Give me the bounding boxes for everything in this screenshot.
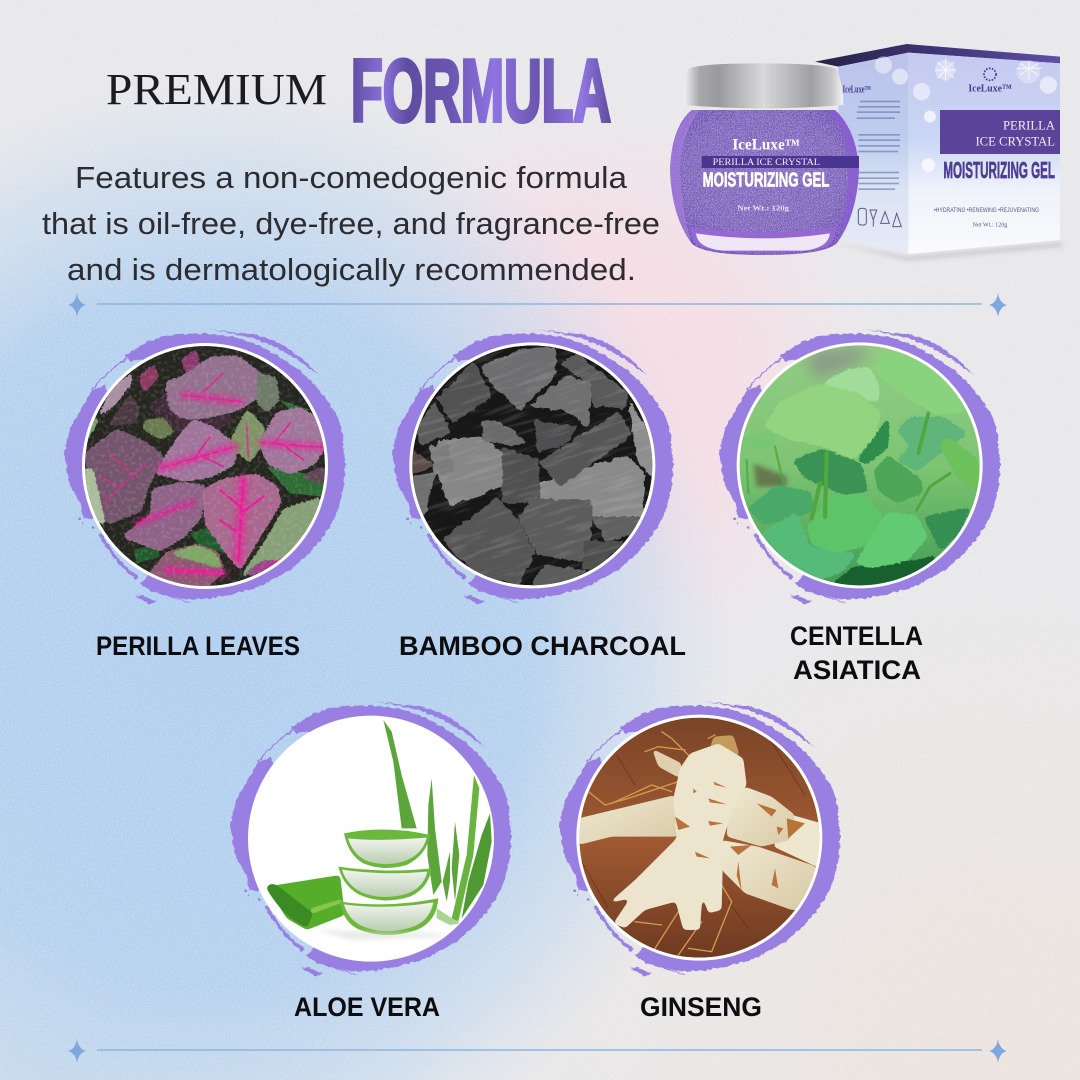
photo: bamboo charcoal	[409, 342, 656, 588]
photo: aloe vera	[248, 716, 494, 962]
photo: centella asiatica	[737, 342, 983, 590]
label: BAMBOO CHARCOAL	[399, 631, 686, 661]
product: jar and box	[670, 44, 1063, 261]
label: CENTELLA	[790, 621, 923, 651]
top divider	[68, 293, 1007, 317]
jar band: PERILLA ICE CRYSTAL	[713, 158, 820, 168]
description text: that is oil-free, dye-free, and fragrance-free	[42, 206, 660, 241]
panel: aloe vera	[230, 701, 511, 1022]
jar	[670, 63, 860, 255]
aloe cut log	[266, 875, 345, 930]
jar brand: IceLuxe™	[732, 136, 800, 153]
jar band	[702, 156, 859, 168]
box net weight: Net Wt.: 120g	[973, 222, 1008, 229]
box brand: IceLuxe™	[968, 84, 1012, 95]
description text: and is dermatologically recommended.	[67, 252, 636, 287]
title: FORMULA	[351, 41, 611, 140]
box band: PERILLA	[1003, 119, 1056, 133]
title	[106, 41, 611, 140]
brush ring	[230, 701, 511, 976]
panel: perilla leaves	[64, 329, 345, 661]
jar title: MOISTURIZING GEL	[703, 169, 829, 192]
brush ring	[64, 329, 345, 604]
box side brand: IceLuxe™	[843, 85, 871, 96]
panel: ginseng	[559, 701, 840, 1022]
jar net weight: Net Wt.: 120g	[737, 204, 789, 213]
title: PREMIUM	[106, 65, 327, 114]
bottom divider	[68, 1039, 1007, 1063]
box band	[940, 110, 1060, 154]
label: GINSENG	[640, 992, 762, 1022]
description text: Features a non-comedogenic formula	[75, 160, 628, 195]
label: ASIATICA	[793, 655, 921, 685]
box benefits: •HYDRATING •RENEWING •REJUVENATING	[934, 207, 1039, 214]
photo: perilla leaves	[82, 343, 328, 590]
box side icons	[858, 208, 901, 227]
label: PERILLA LEAVES	[96, 631, 300, 661]
brush ring	[392, 329, 673, 604]
description text	[42, 160, 660, 287]
panel: centella asiatica	[719, 329, 1000, 685]
aloe slices	[338, 830, 438, 935]
brush ring	[559, 701, 840, 976]
photo: ginseng	[576, 715, 822, 961]
box band: ICE CRYSTAL	[975, 135, 1055, 149]
panel: bamboo charcoal	[392, 330, 686, 656]
brush ring	[719, 329, 1000, 604]
product box	[815, 44, 1063, 261]
label: ALOE VERA	[294, 992, 440, 1022]
label	[790, 621, 923, 685]
lid	[683, 63, 843, 108]
box side text	[857, 101, 900, 190]
